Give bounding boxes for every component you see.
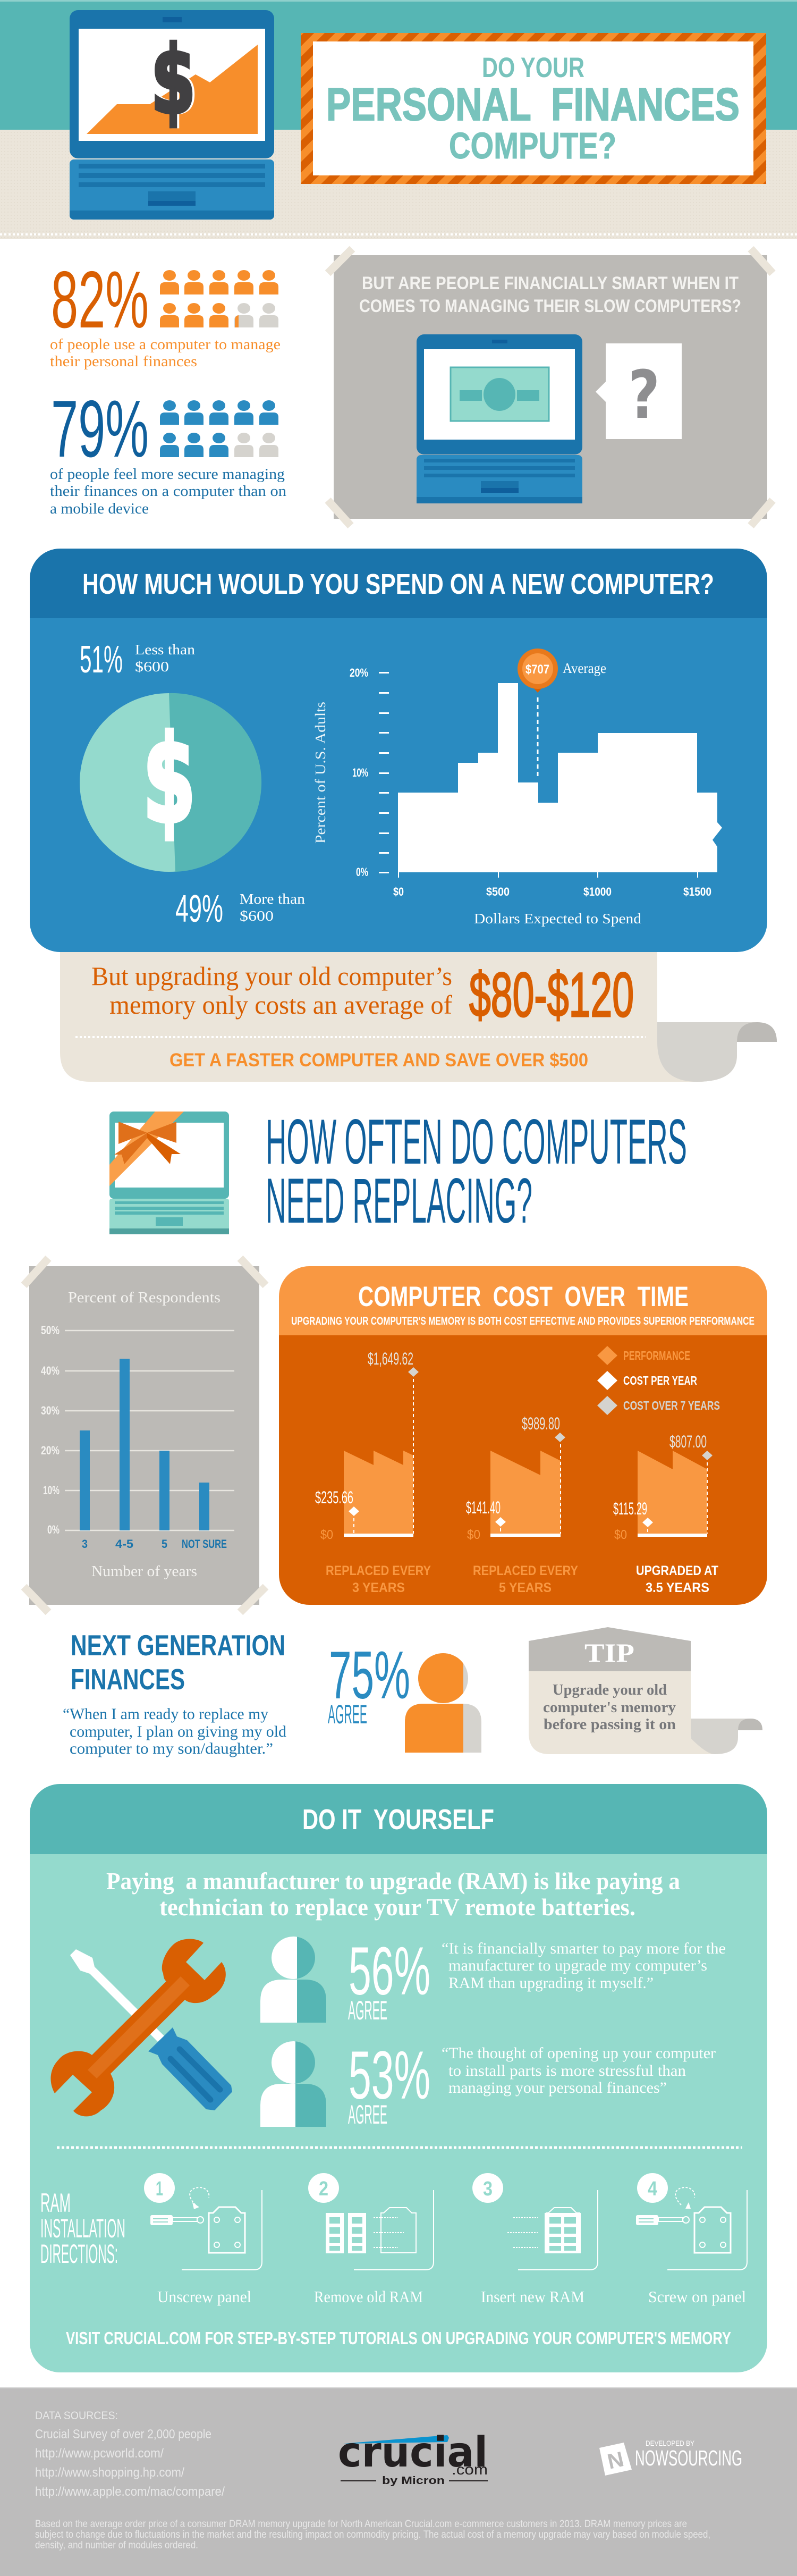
step 2: remove old RAM	[308, 2173, 434, 2306]
title box: DO YOUR	[482, 52, 584, 83]
histogram: dollars expected to spend: $500	[486, 885, 510, 898]
logo: crucial by micron: by Micron	[382, 2475, 445, 2487]
heading: RAM installation directions: RAM	[40, 2188, 71, 2218]
panel: bar chart replacement years: Percent of Respondents	[68, 1289, 221, 1306]
panel: do it yourself: DO IT YOURSELF	[302, 1804, 494, 1836]
panel: bar chart replacement years: 4-5	[115, 1537, 133, 1551]
legend: PERFORMANCE	[623, 1349, 690, 1362]
disclaimer: density, and number of modules ordered.	[35, 2540, 198, 2551]
disclaimer: subject to change due to fluctuations in the market and the resulting impact on commodity pricing. The actual cost of a memory upgrade may vary based on module speed,	[35, 2529, 710, 2540]
logo: crucial by micron: crucial	[338, 2429, 488, 2477]
chart: upgraded at 3.5 years: $807.00	[669, 1432, 707, 1451]
callout: tip scroll	[529, 1627, 762, 1754]
stat: 53 percent: 53%	[349, 2038, 430, 2114]
panel: do it yourself: technician to replace your TV remote batteries.	[159, 1893, 635, 1921]
header background	[0, 0, 797, 239]
panel: financially smart: BUT ARE PEOPLE FINANCIALLY SMART WHEN IT	[362, 273, 739, 293]
histogram: dollars expected to spend: 20%	[350, 666, 368, 679]
label: 49 percent	[175, 888, 306, 930]
data sources: http://www.apple.com/mac/compare/	[35, 2485, 225, 2499]
data sources: DATA SOURCES:	[35, 2410, 118, 2422]
stat: 56 percent	[348, 1933, 726, 2025]
callout: tip scroll: Upgrade your old	[553, 1682, 667, 1698]
stat: 79 percent: 79%	[51, 384, 149, 474]
stat: 82 percent: their personal finances	[50, 353, 197, 370]
chart: upgraded at 3.5 years: $0	[614, 1528, 627, 1542]
disclaimer	[35, 2519, 710, 2551]
histogram: dollars expected to spend	[312, 649, 722, 927]
chart: upgraded at 3.5 years: UPGRADED AT	[636, 1563, 718, 1578]
step 3: insert new RAM: 3	[483, 2178, 493, 2200]
heading: RAM installation directions	[40, 2188, 125, 2269]
footer	[0, 2387, 797, 2576]
step 4: screw on panel: Screw on panel	[648, 2287, 746, 2306]
panel: financially smart: COMES TO MANAGING THEIR SLOW COMPUTERS?	[359, 296, 741, 316]
block: next generation finances: computer to my son/daughter.”	[70, 1740, 273, 1757]
stat: 82 percent: 82%	[51, 255, 149, 345]
stat: 79 percent: their finances on a computer than on	[50, 483, 287, 500]
chart: replaced every 5 years: $989.80	[522, 1414, 560, 1433]
step 1: unscrew panel: Unscrew panel	[157, 2287, 251, 2306]
icon: laptop with banknote	[417, 334, 582, 503]
chart: replaced every 3 years: 3 YEARS	[352, 1580, 405, 1595]
panel: bar chart replacement years: Number of years	[91, 1563, 197, 1580]
icon: person 53 percent	[260, 2041, 326, 2127]
legend	[597, 1346, 720, 1415]
panel: do it yourself: DIRECTIONS:	[40, 2239, 118, 2269]
stat: 56 percent: 56%	[349, 1933, 430, 2009]
marker: average 707: Average	[563, 660, 606, 676]
label: 51 percent: Less than	[135, 642, 196, 658]
stat: 53 percent: AGREE	[348, 2100, 387, 2129]
stat: 75 percent agree: AGREE	[328, 1699, 367, 1729]
histogram: dollars expected to spend: $0	[393, 885, 404, 898]
block: next generation finances: FINANCES	[71, 1663, 185, 1696]
stat: 82 percent: of people use a computer to manage	[50, 336, 281, 353]
logo: nowsourcing: N	[605, 2447, 626, 2474]
icon: person 56 percent	[260, 1937, 326, 2023]
stat: 53 percent	[348, 2038, 716, 2129]
icon: person 75 percent	[405, 1653, 481, 1753]
stat: 53 percent: managing your personal finances”	[448, 2079, 667, 2097]
stat: 56 percent: RAM than upgrading it myself.”	[448, 1974, 654, 1992]
panel: financially smart	[328, 249, 773, 526]
panel: bar chart replacement years: 10%	[43, 1484, 60, 1497]
banner: memory upgrade cost: $80-$120	[469, 960, 634, 1030]
label: 51 percent: 51%	[80, 638, 123, 681]
histogram: dollars expected to spend: 0%	[356, 865, 368, 879]
panel: bar chart replacement years: 5	[162, 1537, 167, 1551]
step 4: screw on panel	[636, 2173, 747, 2306]
stat: 75 percent agree: 75%	[329, 1637, 410, 1713]
logo: nowsourcing	[599, 2439, 742, 2476]
title box: COMPUTE?	[449, 125, 616, 166]
icon: wrench and screwdriver	[51, 1939, 232, 2116]
step 1: unscrew panel: 1	[156, 2178, 163, 2200]
panel: bar chart replacement years: 3	[82, 1537, 88, 1551]
banner: memory upgrade cost: But upgrading your old computer’s	[91, 961, 452, 991]
stat: 82 percent	[50, 255, 281, 370]
panel: bar chart replacement years: 0%	[47, 1523, 60, 1536]
icon: hero laptop: $	[153, 26, 198, 135]
chart: replaced every 5 years: REPLACED EVERY	[473, 1563, 578, 1578]
data sources	[35, 2410, 225, 2499]
step 3: insert new RAM	[472, 2173, 598, 2306]
data sources: http://www.pcworld.com/	[35, 2446, 164, 2461]
panel: do it yourself: INSTALLATION	[40, 2213, 125, 2243]
icon: orange people row	[160, 270, 278, 327]
chart: upgraded at 3.5 years: 3.5 YEARS	[646, 1580, 709, 1595]
heading: how often	[266, 1106, 687, 1236]
panel: how much would you spend	[30, 549, 777, 1082]
block: next generation finances: NEXT GENERATION	[71, 1629, 285, 1662]
stat: 56 percent: AGREE	[348, 1996, 387, 2025]
chart: replaced every 5 years	[466, 1414, 578, 1595]
panel: bar chart replacement years: 50%	[41, 1324, 60, 1337]
chart: replaced every 5 years: 5 YEARS	[499, 1580, 552, 1595]
icon: hero laptop: $	[151, 26, 196, 135]
label: 51 percent: $600	[135, 659, 169, 675]
histogram: dollars expected to spend: 10%	[352, 766, 368, 779]
stat: 53 percent: “The thought of opening up your computer	[442, 2044, 716, 2062]
panel: do it yourself: Paying a manufacturer to upgrade (RAM) is like paying a	[106, 1867, 680, 1895]
pie chart: under or over 600: $	[143, 710, 196, 850]
icon: question speech bubble	[596, 343, 682, 439]
banner: memory upgrade cost: memory only costs an average of	[109, 990, 452, 1020]
chart: replaced every 3 years: $0	[320, 1528, 333, 1542]
histogram: dollars expected to spend: $1000	[583, 885, 612, 898]
chart: replaced every 3 years: $235.66	[315, 1488, 353, 1507]
stat: 75 percent agree	[328, 1651, 481, 1753]
step 1: unscrew panel	[144, 2173, 262, 2306]
data sources: Crucial Survey of over 2,000 people	[35, 2427, 211, 2442]
disclaimer: Based on the average order price of a consumer DRAM memory upgrade for North American Crucial.com e-commerce customers in 2013. DRAM memory prices are	[35, 2519, 687, 2530]
block: next generation finances	[63, 1629, 286, 1757]
data sources: http://www.shopping.hp.com/	[35, 2465, 184, 2480]
callout: tip scroll: before passing it on	[544, 1716, 676, 1733]
block: next generation finances: “When I am ready to replace my	[63, 1705, 268, 1723]
step 2: remove old RAM: Remove old RAM	[314, 2287, 423, 2306]
banner: memory upgrade cost	[75, 960, 777, 1082]
stat: 56 percent: “It is financially smarter to pay more for the	[442, 1940, 726, 1957]
marker: average 707	[518, 649, 606, 779]
logo: crucial by micron: .com	[452, 2461, 488, 2478]
block: next generation finances: computer, I plan on giving my old	[70, 1723, 286, 1740]
banner: memory upgrade cost: GET A FASTER COMPUTER AND SAVE OVER $500	[169, 1050, 588, 1071]
callout: tip scroll: TIP	[584, 1638, 634, 1668]
panel: bar chart replacement years	[24, 1258, 266, 1612]
pie chart: under or over 600	[80, 693, 261, 872]
legend: COST OVER 7 YEARS	[623, 1399, 720, 1412]
label: 49 percent: $600	[240, 908, 274, 924]
chart: upgraded at 3.5 years: $115.29	[613, 1499, 647, 1518]
step 4: screw on panel: 4	[648, 2178, 657, 2200]
stat: 56 percent: manufacturer to upgrade my computer’s	[448, 1957, 707, 1974]
label: 51 percent	[80, 638, 196, 681]
marker: average 707: $707	[525, 662, 549, 677]
stat: 79 percent: a mobile device	[50, 500, 149, 517]
panel: do it yourself	[30, 1784, 767, 2372]
panel: computer cost over time	[279, 1266, 767, 1605]
icon: gift laptop	[109, 1112, 229, 1234]
panel: bar chart replacement years: 40%	[41, 1364, 60, 1377]
panel: bar chart replacement years: 30%	[41, 1404, 60, 1417]
label: 49 percent: More than	[240, 891, 306, 907]
chart: upgraded at 3.5 years	[613, 1432, 718, 1595]
icon: question speech bubble: ?	[628, 357, 660, 434]
icon: blue people row	[160, 400, 278, 457]
panel: bar chart replacement years: 20%	[41, 1444, 60, 1457]
step 3: insert new RAM: Insert new RAM	[481, 2287, 584, 2306]
chart: replaced every 5 years: $141.40	[466, 1498, 501, 1517]
panel: computer cost over time: COMPUTER COST OVER TIME	[358, 1281, 689, 1312]
stat: 79 percent	[50, 384, 287, 517]
histogram: dollars expected to spend: $1500	[683, 885, 711, 898]
histogram: dollars expected to spend: Dollars Expected to Spend	[474, 911, 642, 927]
callout: tip scroll: computer's memory	[543, 1699, 676, 1716]
chart: replaced every 5 years: $0	[467, 1528, 480, 1542]
chart: replaced every 3 years	[315, 1349, 431, 1595]
histogram: dollars expected to spend: Percent of U.S. Adults	[312, 702, 328, 844]
chart: replaced every 3 years: $1,649.62	[368, 1349, 413, 1368]
logo: nowsourcing: DEVELOPED BY	[646, 2439, 695, 2447]
stat: 53 percent: to install parts is more stressful than	[448, 2062, 686, 2080]
stat: 79 percent: of people feel more secure managing	[50, 466, 285, 483]
step 2: remove old RAM: 2	[319, 2178, 328, 2200]
title box	[301, 33, 766, 184]
chart: replaced every 3 years: REPLACED EVERY	[326, 1563, 431, 1578]
label: 49 percent: 49%	[175, 888, 223, 930]
panel: bar chart replacement years: NOT SURE	[182, 1537, 227, 1551]
icon: hero laptop	[70, 10, 274, 220]
legend: COST PER YEAR	[623, 1374, 697, 1387]
